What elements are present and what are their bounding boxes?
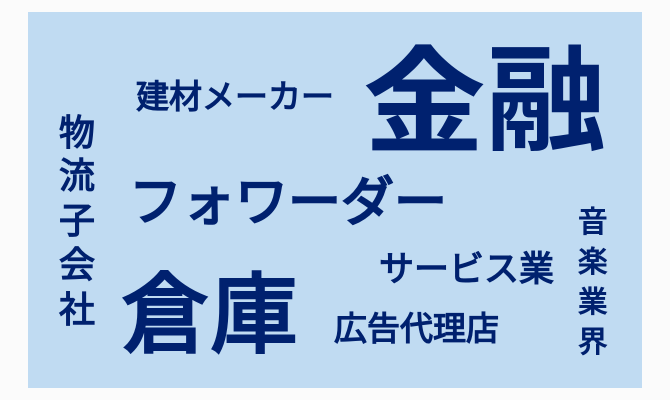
word: フォワーダー: フォワーダー [129,173,447,232]
word: 物流子会社 (vertical): 会 [59,244,95,285]
word: 音楽業界 (vertical) [578,206,608,359]
word: 音楽業界 (vertical): 業 [578,286,608,319]
word: 金融 [363,36,606,168]
word: 音楽業界 (vertical): 音 [578,206,608,239]
word: 物流子会社 (vertical): 社 [59,289,95,330]
word: 物流子会社 (vertical) [59,112,95,330]
word: 建材メーカー: 建材メーカー [136,78,334,115]
word: 物流子会社 (vertical): 流 [59,155,95,196]
word: 倉庫: 倉庫 [122,267,300,364]
word: サービス業: サービス業 [379,250,554,289]
word: 広告代理店: 広告代理店 [334,310,499,347]
word: 物流子会社 (vertical): 物 [59,112,95,153]
word: 金融: 融 [486,36,606,165]
word: 音楽業界 (vertical): 界 [578,326,608,359]
word: 物流子会社 (vertical): 子 [59,200,95,241]
word: 金融: 金 [363,39,486,168]
word: 音楽業界 (vertical): 楽 [578,246,608,279]
